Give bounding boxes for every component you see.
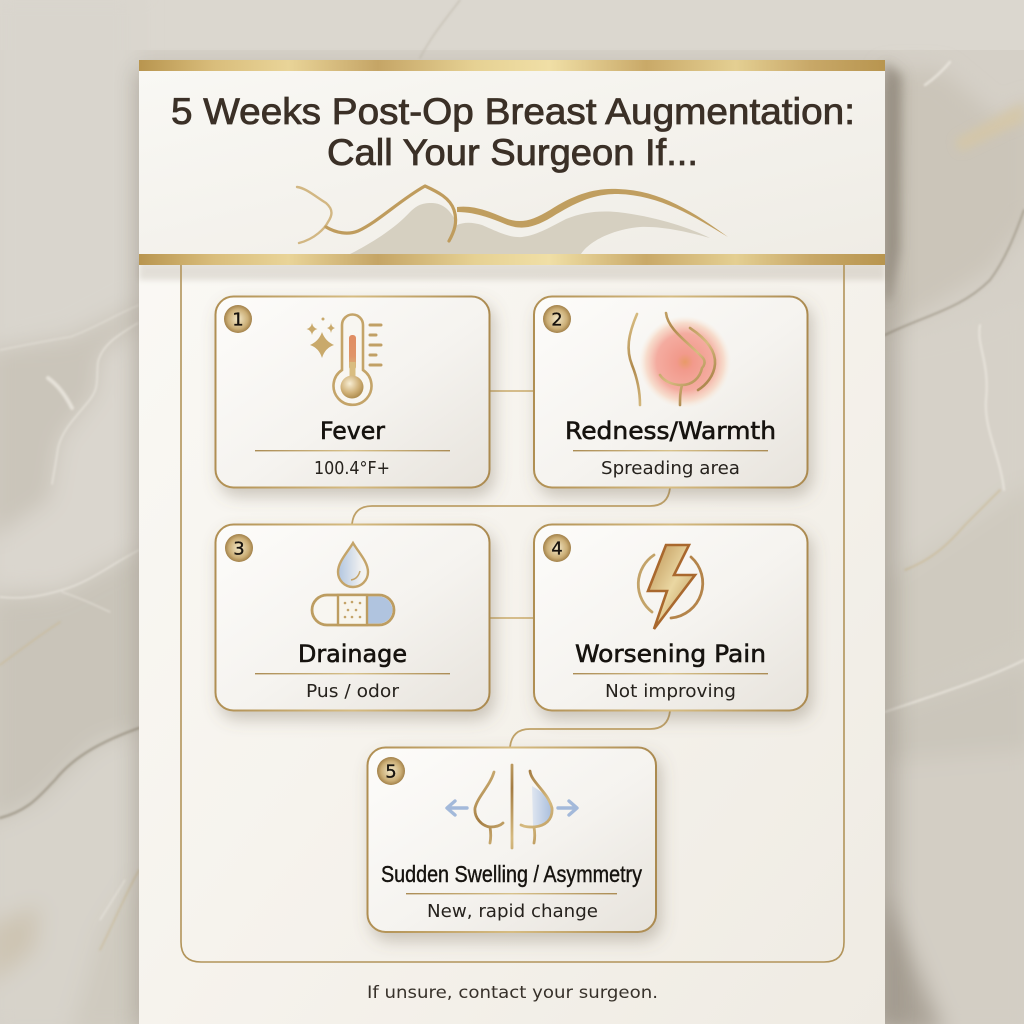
detail: swelling: New, rapid change: [427, 901, 598, 922]
badge 5: [377, 757, 405, 785]
icon: thermometer: [306, 314, 381, 405]
badge 2: 2: [551, 310, 563, 330]
title: [171, 91, 855, 173]
badge 1: 1: [232, 310, 244, 330]
icon: asymmetry: [447, 765, 577, 848]
detail: redness: Spreading area: [601, 458, 740, 479]
icon: breast with redness: [629, 313, 731, 408]
panel: card 5 swelling: [368, 748, 656, 932]
connector: 3 to 4: [490, 617, 534, 619]
badge 2: [543, 305, 571, 333]
paper sheet: [136, 60, 902, 1024]
icon: drop and bandage: [312, 543, 394, 625]
panel: card 2 redness: [534, 296, 808, 488]
connector: 2 to 3: [352, 488, 670, 524]
panel: card 1 fever: [216, 296, 490, 488]
badge 3: [225, 534, 253, 562]
header bar shadow: [139, 262, 885, 280]
decorative body silhouette: [297, 186, 728, 254]
connector: 1 to 2: [490, 390, 534, 392]
footer note: If unsure, contact your surgeon.: [367, 983, 658, 1002]
panel: card 3 drainage: [216, 524, 490, 710]
panel: card 4 pain: [534, 524, 808, 710]
heading: redness: Redness/Warmth: [565, 417, 776, 445]
detail: fever: 100.4°F+: [314, 458, 390, 479]
connector: 4 to 5: [510, 711, 670, 747]
bottom gold bar of header: [139, 254, 885, 265]
top gold bar: [139, 60, 885, 71]
heading: swelling: Sudden Swelling / Asymmetry: [381, 861, 642, 887]
badge 4: [543, 534, 571, 562]
icon: lightning bolt: [638, 545, 703, 629]
gold patches: [955, 102, 1024, 152]
title: Call Your Surgeon If...: [327, 132, 698, 173]
detail: drainage: Pus / odor: [306, 681, 400, 702]
outer frame line: [181, 265, 844, 962]
badge 3: 3: [233, 538, 245, 560]
header band: [139, 60, 885, 255]
badge 4: 4: [551, 538, 563, 560]
badge 1: [224, 305, 252, 333]
heading: pain: Worsening Pain: [575, 640, 766, 668]
badge 5: 5: [385, 762, 397, 782]
heading: fever: Fever: [320, 417, 385, 445]
heading: drainage: Drainage: [298, 640, 407, 668]
detail: pain: Not improving: [605, 681, 736, 702]
title: 5 Weeks Post-Op Breast Augmentation:: [171, 91, 855, 132]
